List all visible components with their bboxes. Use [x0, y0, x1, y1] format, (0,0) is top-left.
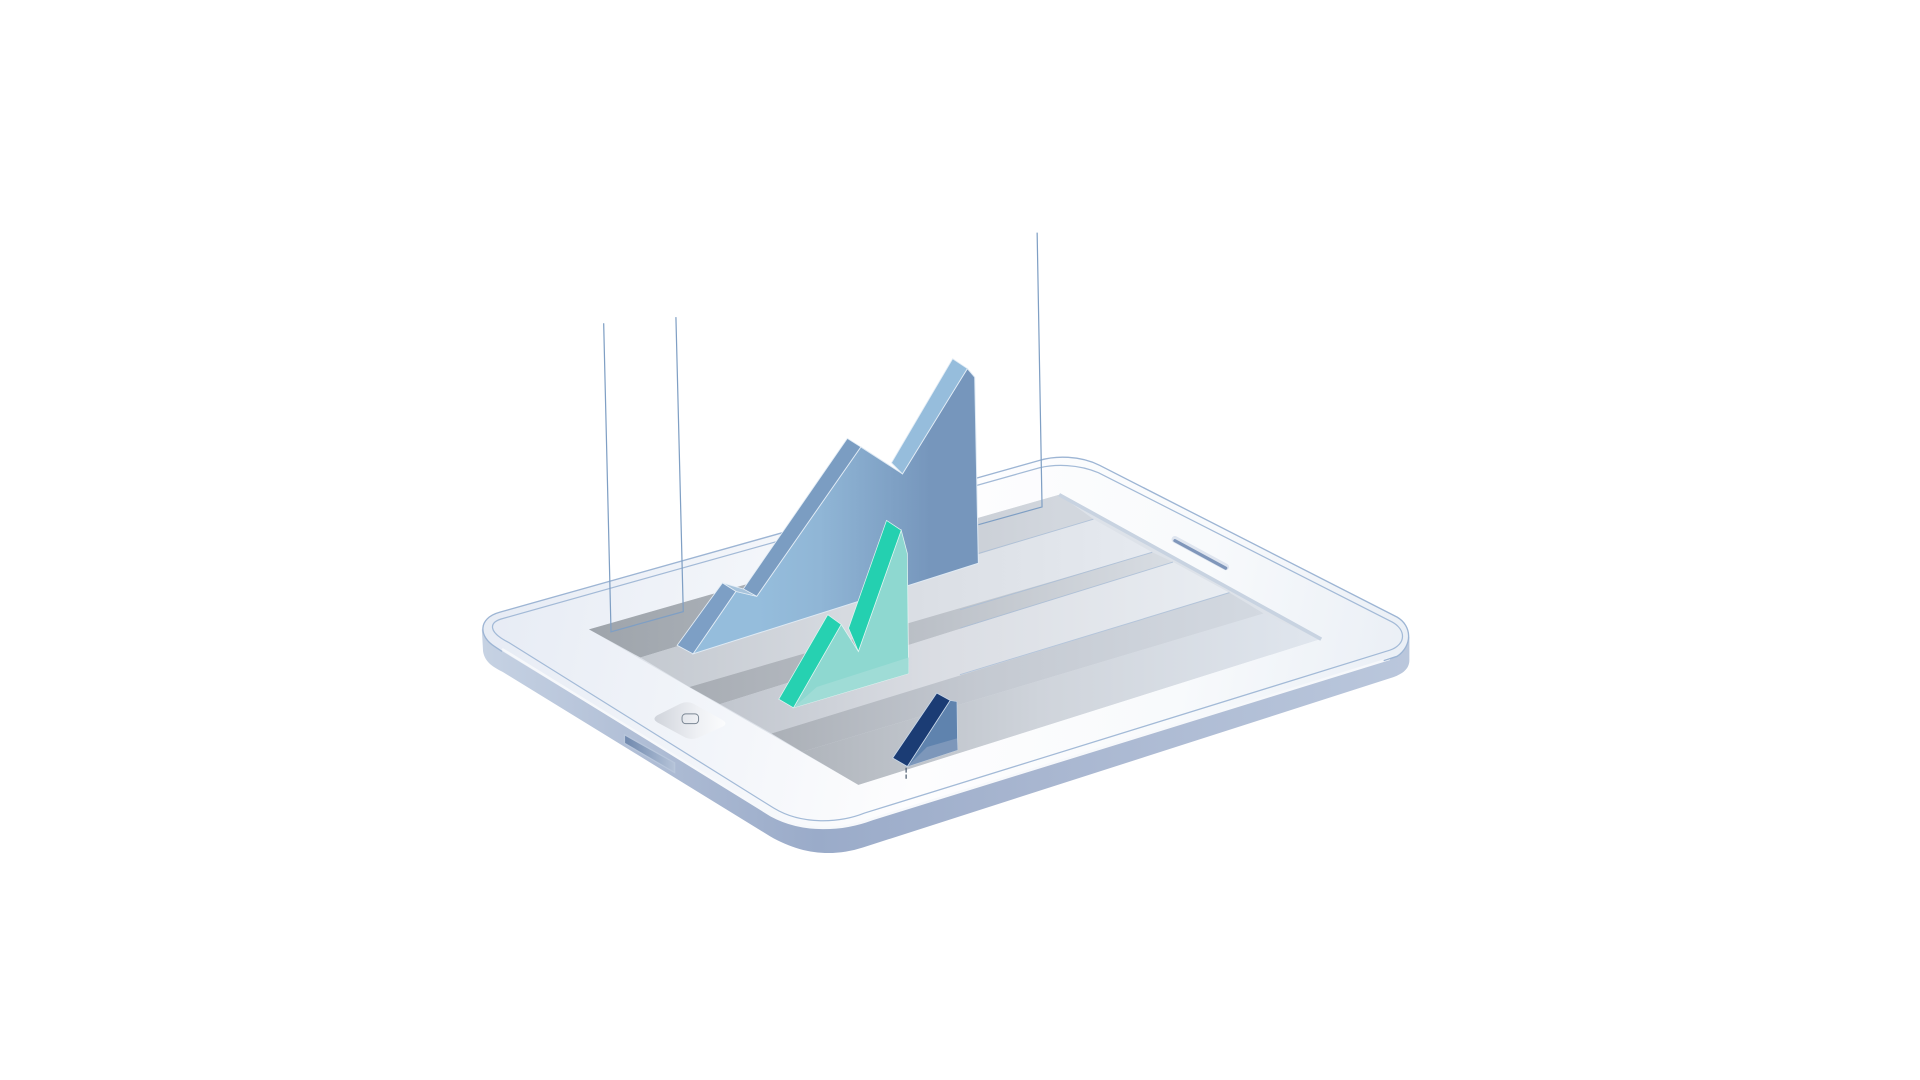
navy ridge: [893, 693, 950, 767]
navy chart lower band: [907, 738, 958, 767]
large area chart: [677, 359, 978, 654]
green ridge near: [779, 615, 841, 708]
green chart face: [793, 530, 909, 708]
side port: [624, 735, 675, 773]
stripe 5: [771, 593, 1264, 752]
green ridge far: [849, 520, 901, 651]
stripe 2: [640, 519, 1152, 687]
home button: [654, 702, 726, 739]
large chart far ridge: [891, 359, 967, 474]
stripe 1: [589, 495, 1093, 658]
stripe 4: [720, 562, 1229, 733]
large chart mid ridge: [743, 438, 861, 596]
navy dashed marker: [905, 768, 907, 779]
speaker slot: [1175, 539, 1226, 568]
green area chart: [779, 520, 909, 708]
large chart face: [693, 369, 978, 654]
home button glyph: [682, 714, 699, 724]
tablet top face: [483, 457, 1409, 828]
large chart near ridge: [677, 583, 736, 654]
stripe 6: [802, 613, 1320, 785]
screen with stripes: [589, 495, 1320, 785]
navy area chart: [893, 693, 958, 779]
large chart connector: [722, 583, 757, 596]
stripe 3: [689, 552, 1173, 704]
leader lines: [604, 233, 1042, 632]
tablet body side: [482, 629, 1409, 853]
navy chart face: [907, 700, 958, 767]
green chart lower band: [793, 658, 909, 708]
tablet bezel inner line: [492, 465, 1403, 821]
